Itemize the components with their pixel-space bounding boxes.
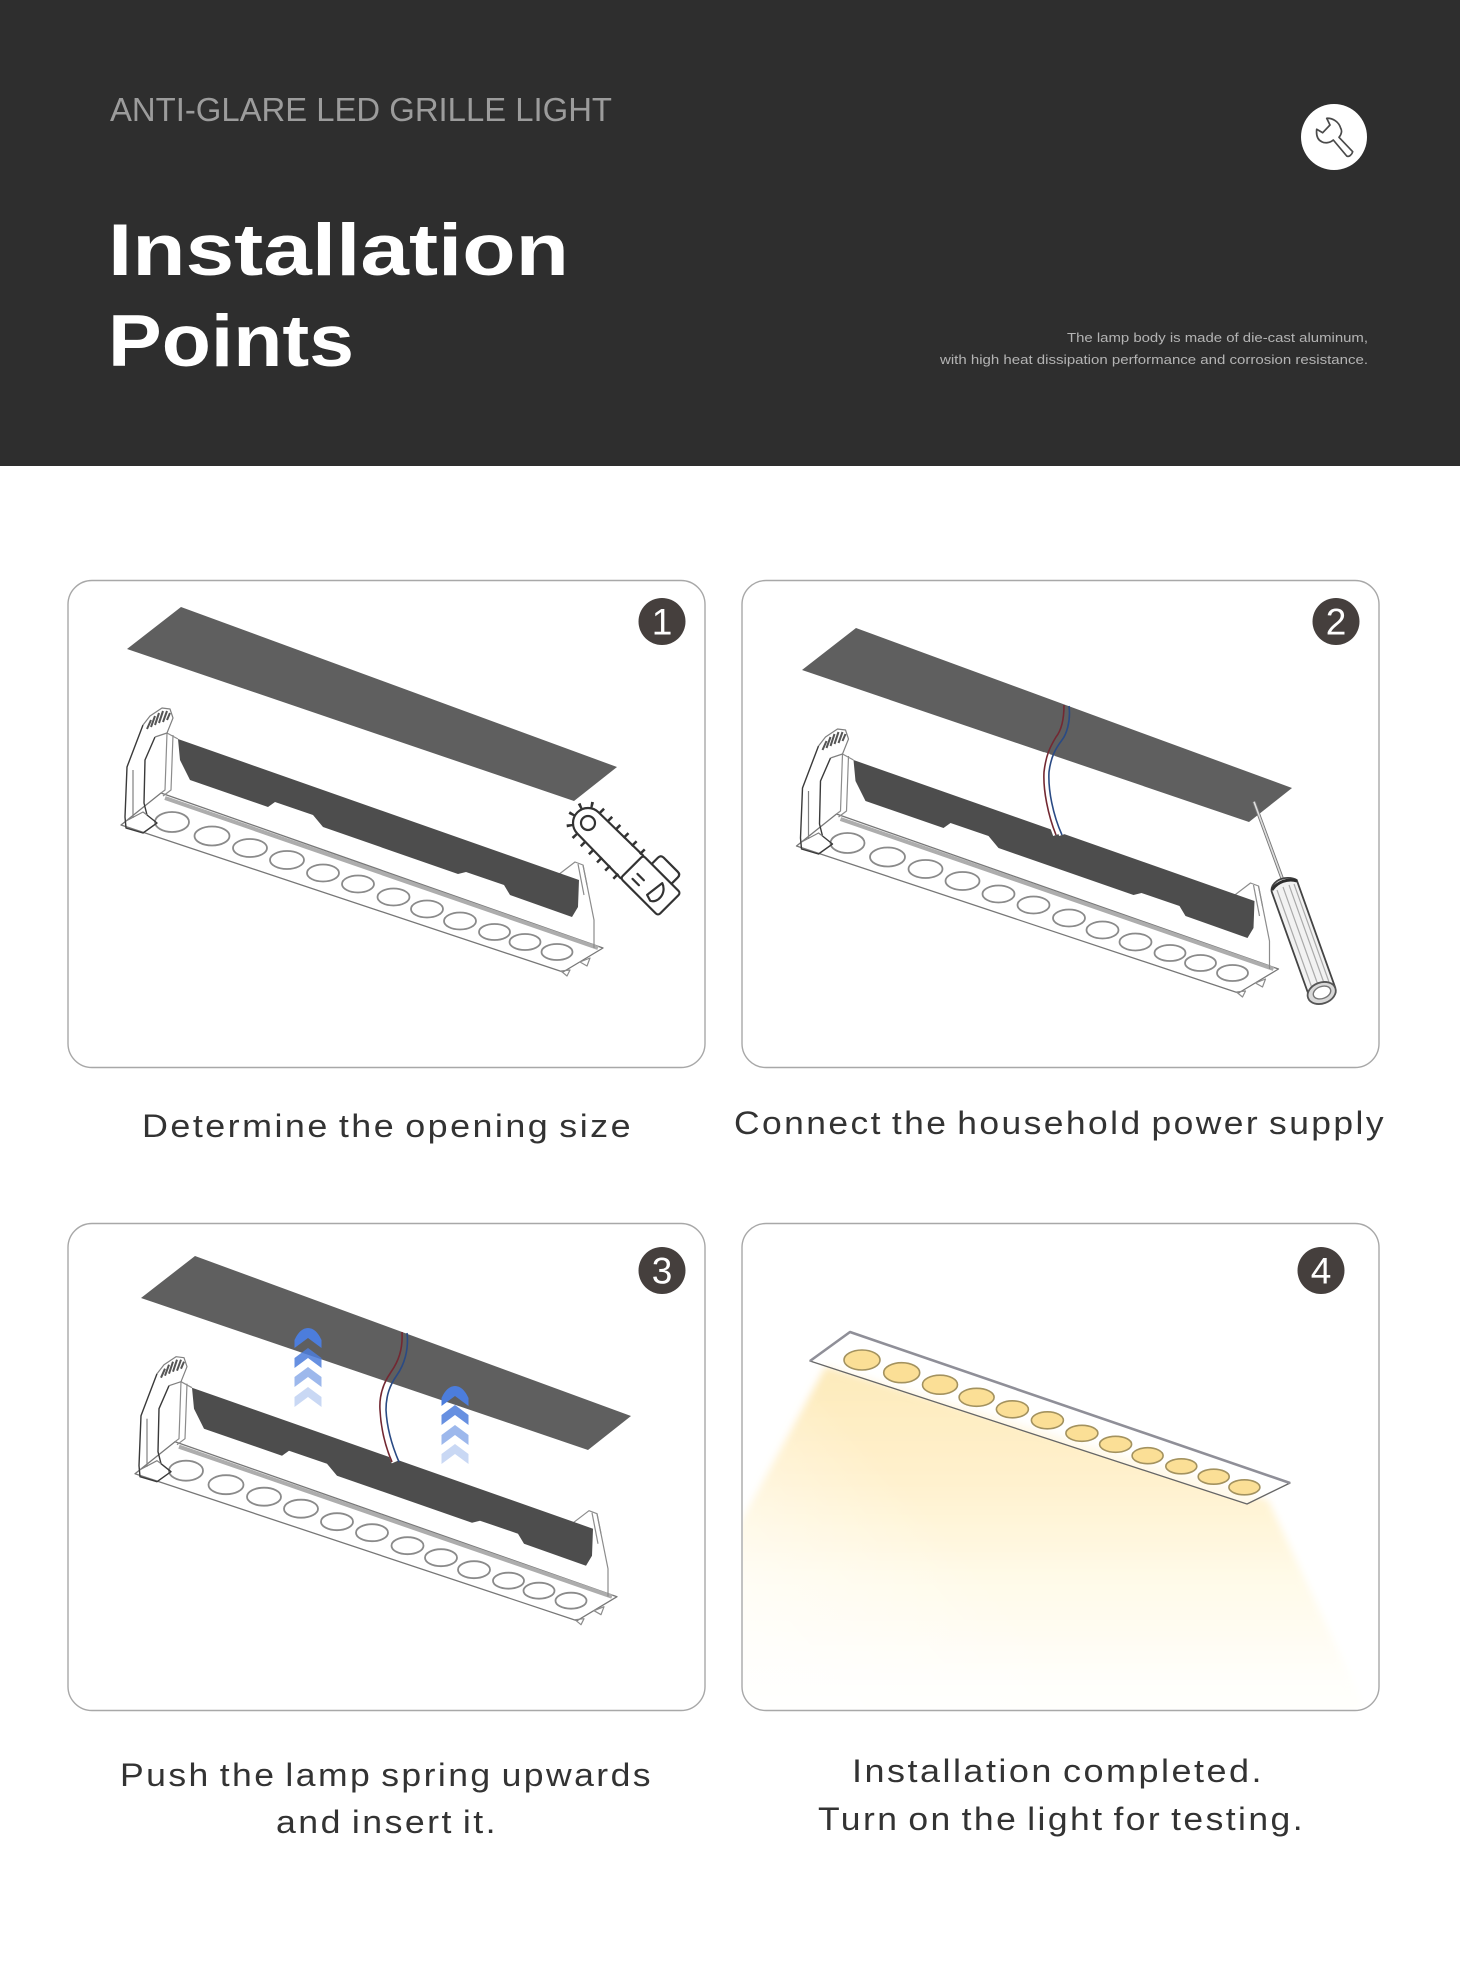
panel: step 4 [720,1224,1379,1730]
description text: with high heat dissipation performance and corrosion resistance. [939,352,1368,367]
description text: The lamp body is made of die-cast aluminum, [1067,330,1368,345]
wires [1043,705,1069,835]
number badge 3 [638,1247,686,1294]
number badge 4 [1298,1247,1344,1294]
caption 4: Installation completed. [852,1753,1264,1789]
lamp face [810,1332,1290,1504]
number badge 1: 1 [652,602,672,642]
lamp body [796,729,1278,997]
arrow: right chevrons [442,1386,468,1464]
title [108,210,569,382]
lamp body [135,1357,617,1625]
caption 3: and insert it. [276,1804,498,1840]
panel: step 3 [68,1224,705,1710]
number badge 4: 4 [1311,1250,1331,1292]
icon: chainsaw [563,790,690,917]
caption 2: Connect the household power supply [734,1105,1386,1141]
title: Points [108,301,354,382]
subtitle: ANTI-GLARE LED GRILLE LIGHT [110,91,612,128]
wires [380,1332,407,1462]
panel: step 2 [742,580,1379,1068]
number badge 3: 3 [652,1250,672,1292]
caption 3: Push the lamp spring upwards [120,1757,653,1793]
number badge 1 [638,598,686,645]
icon: wrench in circle [1301,104,1367,170]
title: Installation [108,210,569,291]
light beam [743,1365,1334,1660]
icon: screwdriver [1254,802,1339,1008]
caption 4 [818,1753,1305,1837]
ceiling plate [802,628,1292,822]
ceiling plate [127,607,617,801]
arrow: left chevrons [294,1328,322,1407]
number badge 2: 2 [1326,602,1346,642]
description text [939,330,1368,367]
ceiling plate [141,1256,631,1450]
header band [0,0,1460,466]
panel: step 1 [68,580,705,1068]
caption 3 [120,1757,653,1840]
caption 1: Determine the opening size [142,1108,633,1144]
lamp body [121,708,603,976]
number badge 2 [1312,598,1360,645]
caption 4: Turn on the light for testing. [818,1801,1305,1837]
